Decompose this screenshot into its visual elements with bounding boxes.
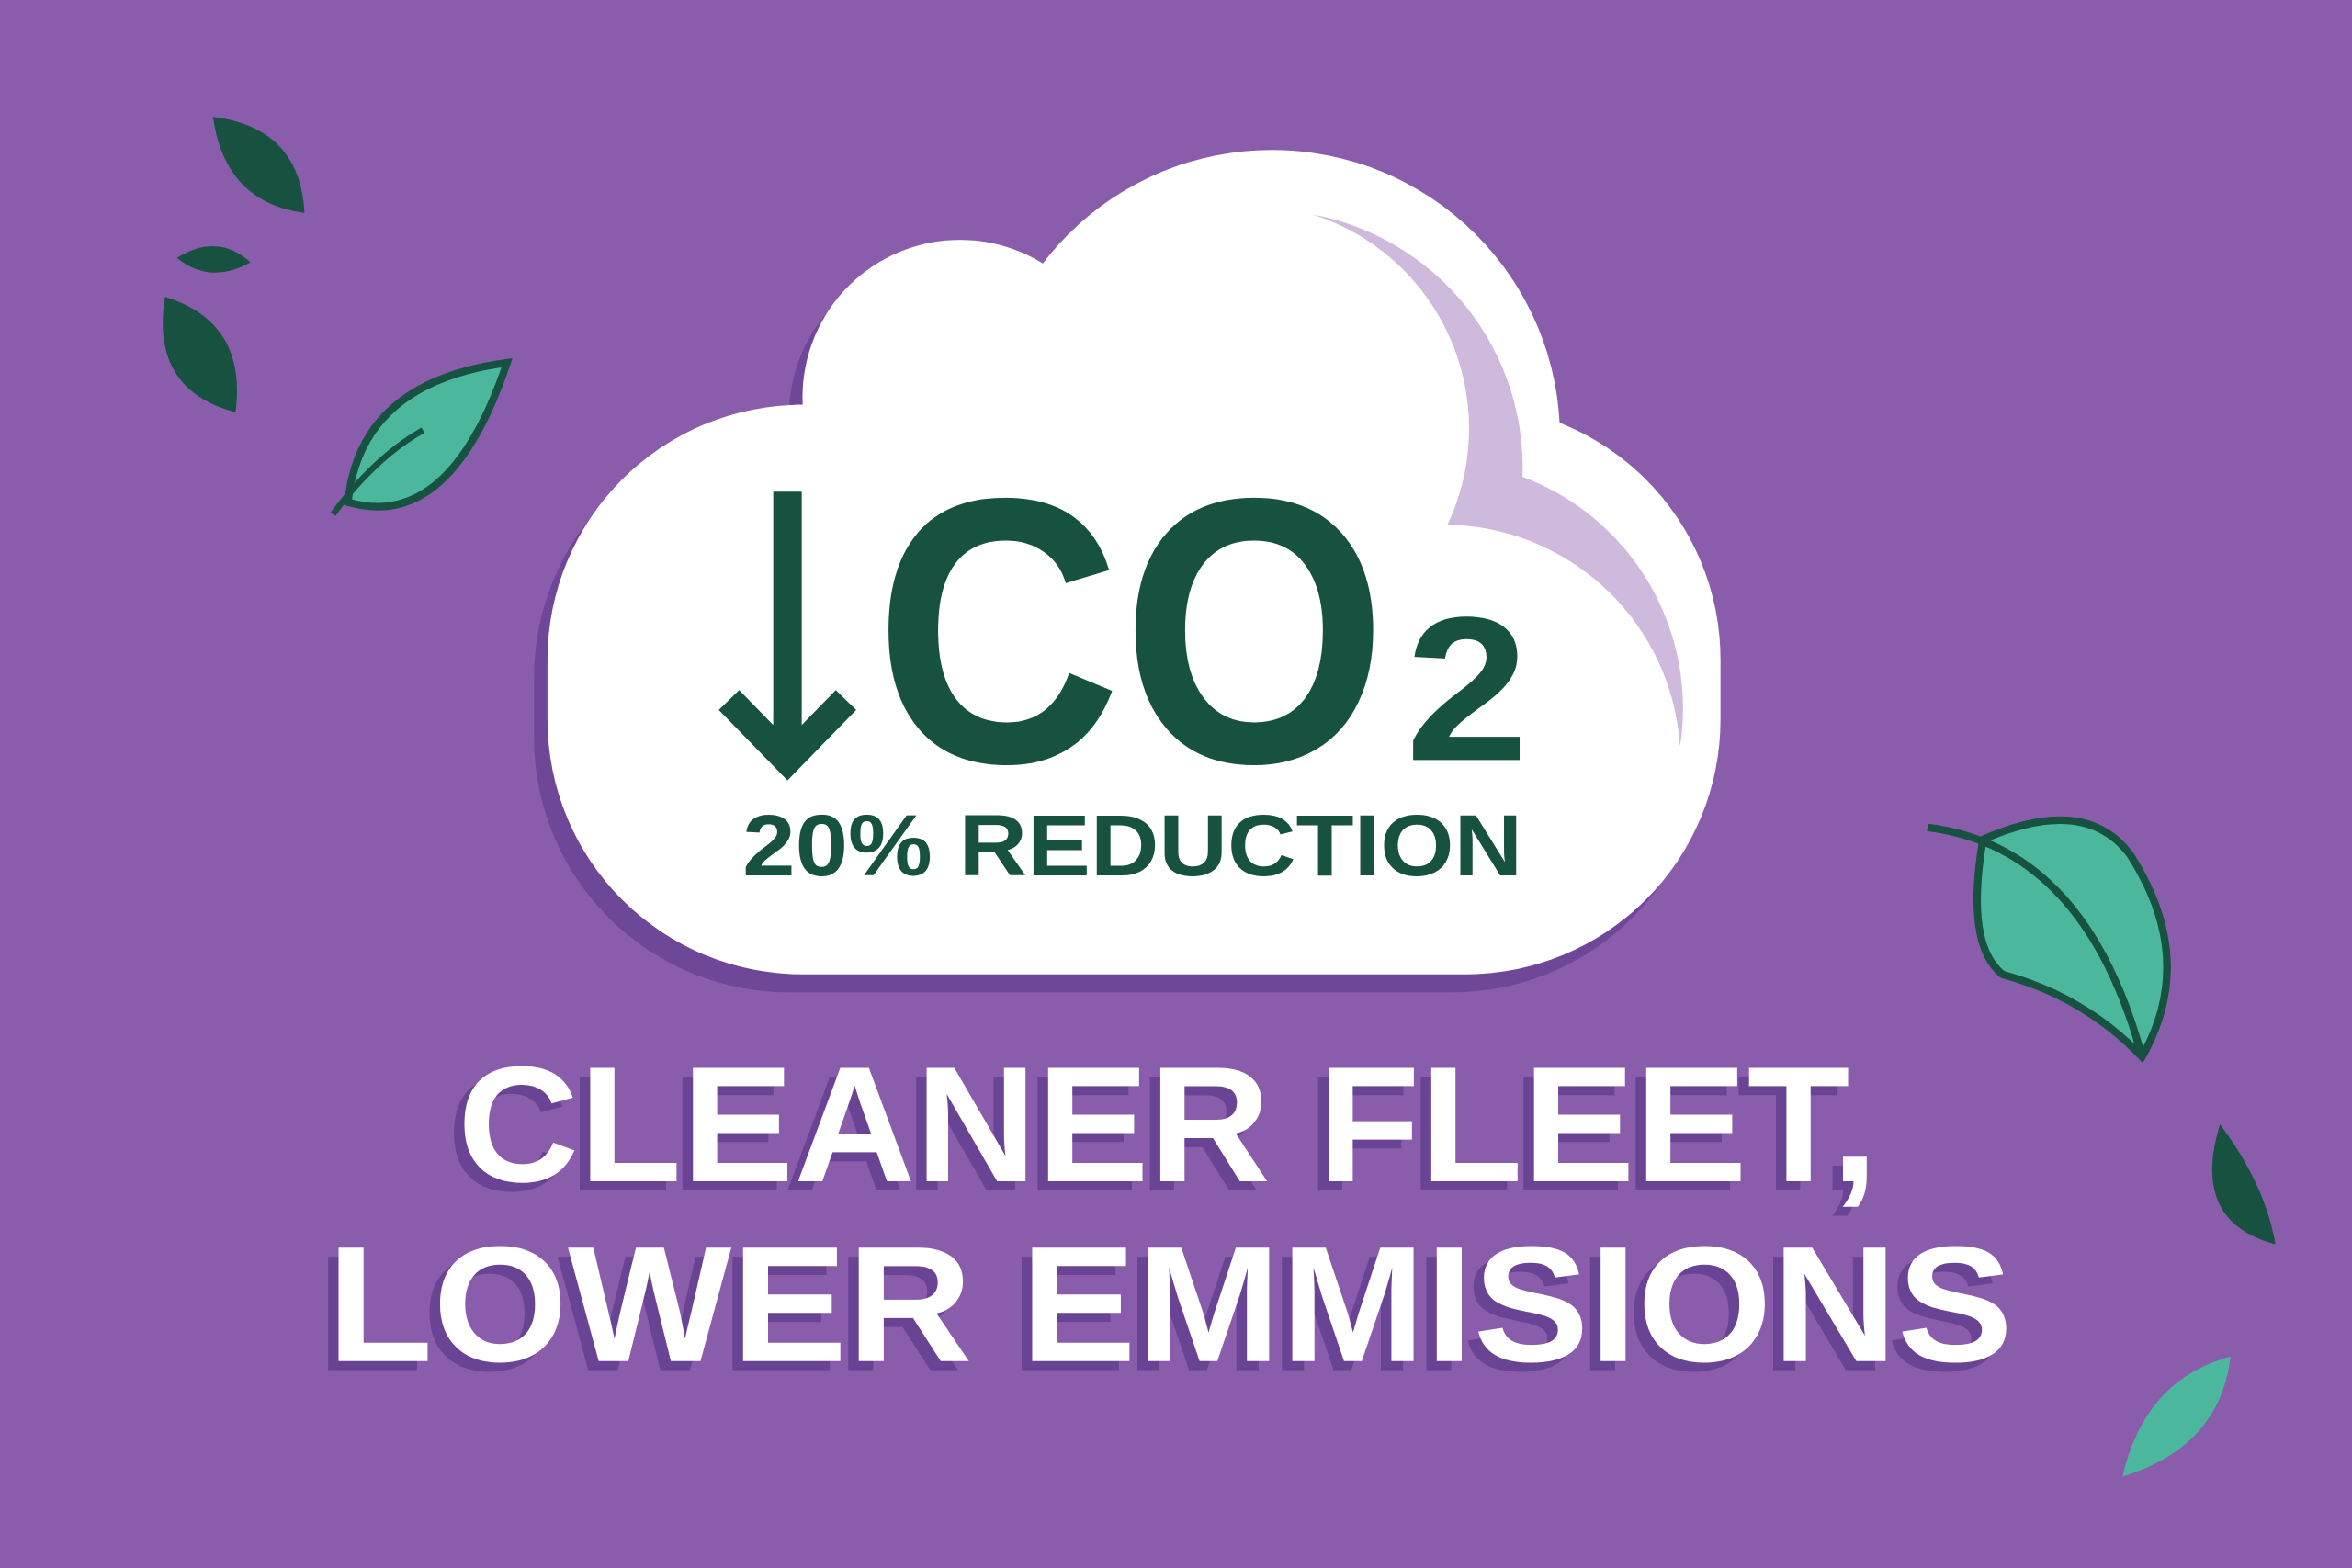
leaves right [1928,820,2276,1476]
cloud shadow [534,168,1707,992]
title [316,1032,2013,1406]
leaves top-left [163,117,507,514]
title: LOWER EMMISIONS [316,1222,2003,1406]
title: CLEANER FLEET, [447,1042,1868,1226]
title: CLEANER FLEET, [458,1032,1878,1217]
reduction text: 20% REDUCTION [742,797,1522,895]
CO2 label: CO [875,421,1387,842]
cloud highlight [1313,214,1683,747]
icon: down arrow [729,491,846,760]
CO2 label: 2 [1406,575,1529,804]
cloud [548,150,1721,975]
title: LOWER EMMISIONS [327,1213,2013,1397]
